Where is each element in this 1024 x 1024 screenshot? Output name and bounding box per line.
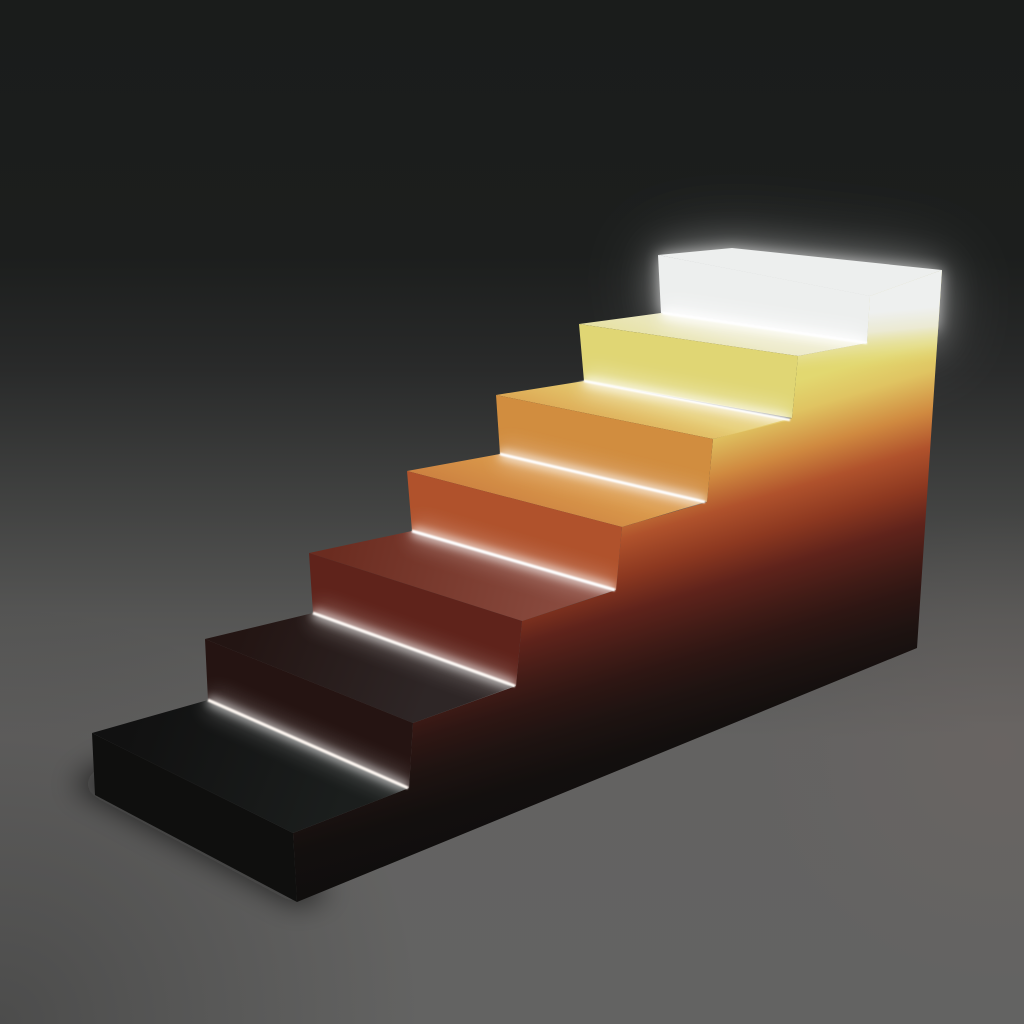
step 3: rust bbox=[309, 531, 615, 686]
step 6: pale yellow bbox=[579, 313, 867, 418]
glow: light strip 1 bbox=[208, 700, 408, 788]
step 2: dark maroon bbox=[205, 613, 515, 788]
light strip 5 bbox=[584, 381, 790, 420]
light strip 2 bbox=[313, 613, 515, 686]
halo: light around the top step bbox=[658, 248, 942, 345]
step 1: black bbox=[92, 700, 409, 902]
glow: light strip 3 bbox=[412, 531, 615, 590]
light strip 6 bbox=[662, 313, 867, 343]
scene: glowing staircase bbox=[0, 211, 1024, 1024]
glow: light strip 5 bbox=[584, 381, 790, 420]
glow: light strip 6 bbox=[662, 313, 867, 343]
side face with heat gradient bbox=[293, 260, 950, 902]
glow: light strip 4 bbox=[500, 454, 705, 502]
step 7: white top block bbox=[658, 248, 942, 343]
light strip 3 bbox=[412, 531, 615, 590]
glow: light strip 2 bbox=[313, 613, 515, 686]
step 5: amber bbox=[496, 381, 790, 502]
light strip 1 bbox=[208, 700, 408, 788]
step 4: orange bbox=[407, 454, 705, 590]
staircase bbox=[92, 248, 950, 902]
light strip 4 bbox=[500, 454, 705, 502]
floor shadow under staircase bbox=[72, 760, 330, 905]
